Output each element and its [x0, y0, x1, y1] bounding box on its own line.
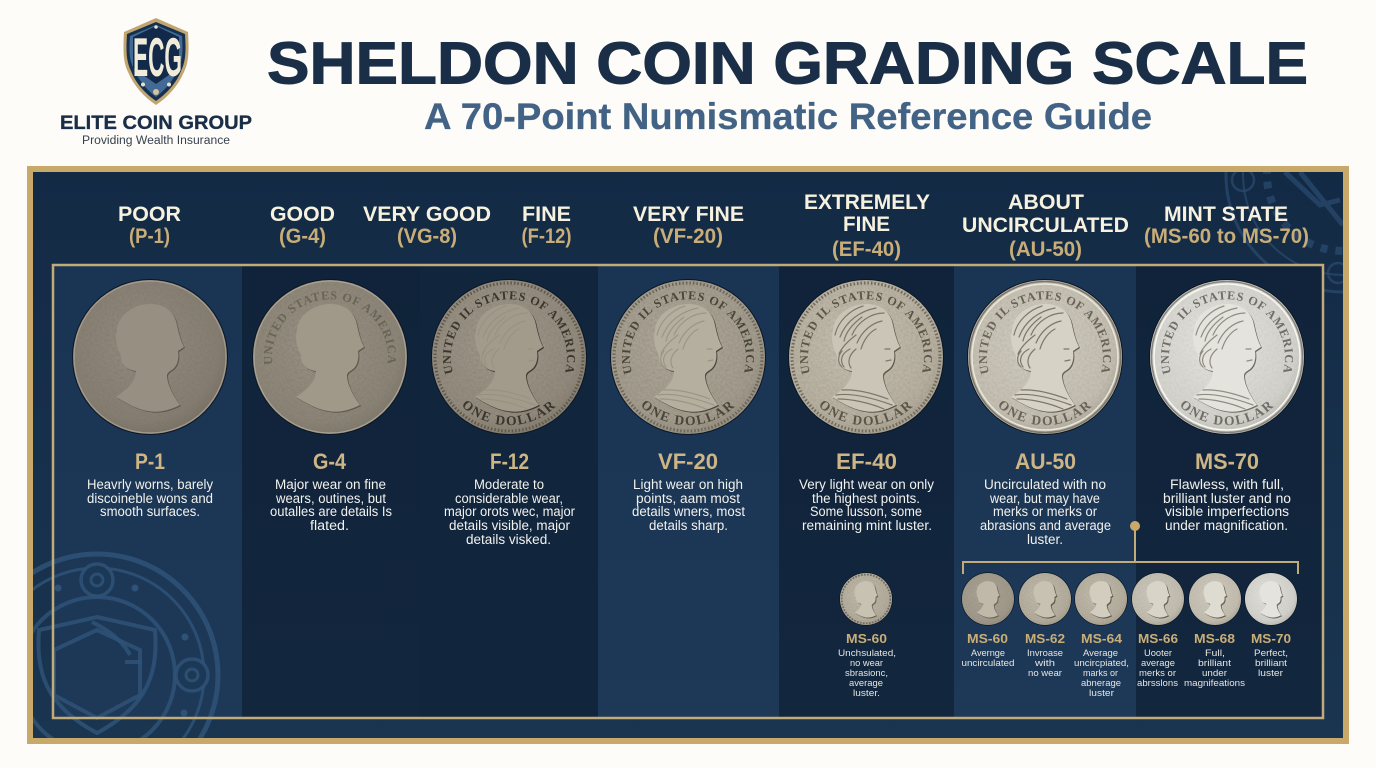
description: details visible, major [449, 518, 571, 533]
sub-grade: MS-66 [1131, 572, 1185, 689]
heading: Mint State: (MS-60 to MS-70) [1144, 225, 1309, 248]
text: luster [1258, 668, 1283, 679]
text: Average [1083, 648, 1118, 659]
logo name: ELITE COIN GROUP [60, 113, 252, 134]
heading: Good: (G-4) [279, 225, 326, 248]
coin: F-12: UNITED IL STATES OF AMERICA [442, 291, 575, 374]
description [444, 477, 575, 547]
heading: Very Good [363, 203, 491, 248]
description: Heavrly worns, barely [87, 477, 213, 492]
small description: MS-60: sbrasionc, [845, 668, 888, 679]
heading: Good [270, 203, 335, 248]
small coin [1074, 572, 1128, 626]
text: Avernge [971, 648, 1005, 659]
heading: About Uncirculated: ABOUT [1008, 191, 1084, 214]
coin: small MS-60 [839, 572, 893, 626]
column: F-12 [431, 279, 587, 547]
small coin [1188, 572, 1242, 626]
column: EF-40 [788, 279, 944, 699]
heading: Fine: FINE [522, 203, 571, 226]
logo: Elite Coin Group: ECG [133, 26, 182, 88]
coin: MS-70 [1149, 279, 1305, 435]
label: MS-64 [1081, 631, 1123, 646]
description: points, aam most [636, 491, 740, 506]
text: magnifeations [1184, 678, 1245, 689]
title: SHELDON COIN GRADING SCALE [267, 30, 1308, 96]
text: Perfect, [1254, 648, 1288, 659]
text: marks or [1083, 668, 1118, 679]
coin: MS-70: ONE DOLLAR [1181, 401, 1274, 426]
small coin [1131, 572, 1185, 626]
description [799, 477, 934, 533]
heading: Poor: POOR [118, 203, 181, 226]
description [1163, 477, 1291, 533]
text: luster [1089, 688, 1114, 699]
description: brilliant luster and no [1163, 491, 1291, 506]
description: wear, but may have [989, 491, 1100, 506]
coin: EF-40: ONE DOLLAR [820, 401, 913, 426]
column: VF-20 [610, 279, 766, 533]
description: the highest points. [812, 491, 920, 506]
grade label: P-1 [135, 449, 165, 474]
heading: Poor: (P-1) [129, 225, 170, 248]
description: Some lusson, some [810, 504, 922, 519]
coin: MS-70: UNITED IL STATES OF AMERICA [1160, 291, 1293, 374]
text: Uooter [1144, 648, 1172, 659]
coin: VF-20: UNITED IL STATES OF AMERICA [622, 291, 754, 374]
label: MS-62 [1025, 631, 1065, 646]
text: merks or [1139, 668, 1176, 679]
heading: Good: GOOD [270, 203, 335, 226]
heading: Mint State [1144, 203, 1309, 248]
heading: Fine [522, 203, 572, 248]
description [980, 477, 1111, 547]
description: visible imperfections [1165, 504, 1289, 519]
grade label: G-4 [313, 449, 347, 474]
coin: EF-40 [788, 279, 944, 435]
column: AU-50 [967, 279, 1123, 547]
small description: MS-60: average [849, 678, 883, 689]
description [87, 477, 213, 519]
description [632, 477, 745, 533]
sub-grade: MS-68 [1184, 572, 1245, 689]
text: brilliant [1198, 658, 1231, 669]
heading: About Uncirculated [962, 191, 1129, 261]
description: Very light wear on only [799, 477, 934, 492]
text [1254, 648, 1288, 679]
icon: ECG shield [123, 18, 189, 105]
coin: AU-50: UNITED IL STATES OF AMERICA [978, 291, 1111, 374]
coin: VF-20 [610, 279, 766, 435]
text: average [1141, 658, 1175, 669]
text: no wear [1028, 668, 1062, 679]
heading: Very Fine [633, 203, 744, 248]
small description: MS-60: no wear [850, 658, 883, 669]
coin: P-1 [72, 279, 228, 435]
small description: MS-60: Unchsulated, [838, 648, 896, 659]
column: MS-70 [1149, 279, 1305, 533]
description: Flawless, with full, [1170, 477, 1284, 492]
description: luster. [1027, 532, 1063, 547]
heading: Very Good: VERY GOOD [363, 203, 491, 226]
heading: Mint State: MINT STATE [1164, 203, 1288, 226]
text: uncirculated [962, 658, 1014, 669]
logo tagline: Providing Wealth Insurance [82, 135, 230, 147]
description: details visked. [466, 532, 551, 547]
label: MS-68 [1194, 631, 1235, 646]
text: abnerage [1081, 678, 1121, 689]
coin: G-4 [252, 279, 408, 435]
description: major orots wec, major [444, 504, 575, 519]
description: smooth surfaces. [100, 504, 200, 519]
column backgrounds [54, 266, 1322, 717]
column: P-1 [72, 279, 228, 519]
heading: About Uncirculated: UNCIRCULATED [962, 214, 1129, 237]
logo: Elite Coin Group [60, 18, 252, 147]
description: merks or merks or [993, 504, 1097, 519]
sub-grade: MS-60 [961, 572, 1015, 669]
text: Invroase [1027, 648, 1063, 659]
heading: About Uncirculated: (AU-50) [1009, 238, 1082, 261]
label: MS-70 [1251, 631, 1291, 646]
panel: main frame [30, 169, 1346, 741]
heading: Extremely Fine: (EF-40) [832, 238, 901, 261]
label: MS-66 [1138, 631, 1178, 646]
text: Full, [1205, 648, 1225, 659]
description: discoineble wons and [87, 491, 213, 506]
small label: MS-60: MS-60 [846, 631, 887, 646]
description: flated. [310, 518, 349, 533]
grade label: MS-70 [1195, 449, 1259, 474]
watermark: bottom-left seal [33, 552, 220, 738]
connector: bracket to MS sub-grades [963, 521, 1298, 574]
description: remaining mint luster. [802, 518, 932, 533]
coin: EF-40: UNITED IL STATES OF AMERICA [800, 291, 932, 374]
description: abrasions and average [980, 518, 1111, 533]
sub-grade: MS-62 [1018, 572, 1072, 679]
text [1184, 648, 1245, 689]
text: uncircpiated, [1074, 658, 1129, 669]
grade label: VF-20 [658, 449, 718, 474]
watermark: top-right seal [1224, 172, 1343, 294]
heading: Very Fine: (VF-20) [653, 225, 723, 248]
sub-grade: MS-64 [1074, 572, 1129, 699]
description: details wners, most [632, 504, 745, 519]
label: MS-60 [967, 631, 1008, 646]
heading: Very Good: (VG-8) [397, 225, 457, 248]
frame: inner gold border [53, 265, 1323, 718]
description: wears, outines, but [275, 491, 386, 506]
small coin [1018, 572, 1072, 626]
text: with [1034, 658, 1055, 669]
description: under magnification. [1165, 518, 1288, 533]
small description: MS-60 [838, 648, 896, 699]
text [1074, 648, 1129, 699]
text: abrsslons [1137, 678, 1178, 689]
text [1137, 648, 1178, 689]
heading: Extremely Fine: FINE [843, 213, 890, 236]
text [1027, 648, 1063, 679]
column: G-4 [252, 279, 408, 533]
description: details sharp. [649, 518, 728, 533]
description: Major wear on fine [275, 477, 386, 492]
heading: Extremely Fine: EXTREMELY [804, 191, 930, 214]
description: Moderate to [474, 477, 544, 492]
description: Light wear on high [633, 477, 743, 492]
grade label: EF-40 [836, 449, 897, 474]
small description: MS-60: luster. [853, 688, 880, 699]
subtitle: A 70-Point Numismatic Reference Guide [424, 96, 1152, 137]
text: brilliant [1255, 658, 1287, 669]
text [962, 648, 1014, 669]
heading: Very Fine: VERY FINE [633, 203, 744, 226]
coin: AU-50 [967, 279, 1123, 435]
heading: Extremely Fine [804, 191, 930, 261]
description: Uncirculated with no [984, 477, 1106, 492]
description: considerable wear, [455, 491, 563, 506]
coin: F-12 [431, 279, 587, 435]
heading: Fine: (F-12) [522, 225, 572, 248]
coin: AU-50: ONE DOLLAR [999, 401, 1092, 426]
grade label: F-12 [490, 449, 529, 474]
coin: G-4: UNITED STATES OF AMERICA [264, 291, 396, 364]
grade label: AU-50 [1015, 449, 1076, 474]
coin: F-12: ONE DOLLAR [463, 401, 556, 426]
heading: Poor [118, 203, 181, 248]
sub-grade: MS-70 [1244, 572, 1298, 679]
small coin [961, 572, 1015, 626]
description [270, 477, 392, 533]
small coin [1244, 572, 1298, 626]
description: outalles are details Is [270, 504, 392, 519]
text: under [1202, 668, 1227, 679]
coin: VF-20: ONE DOLLAR [642, 401, 735, 426]
